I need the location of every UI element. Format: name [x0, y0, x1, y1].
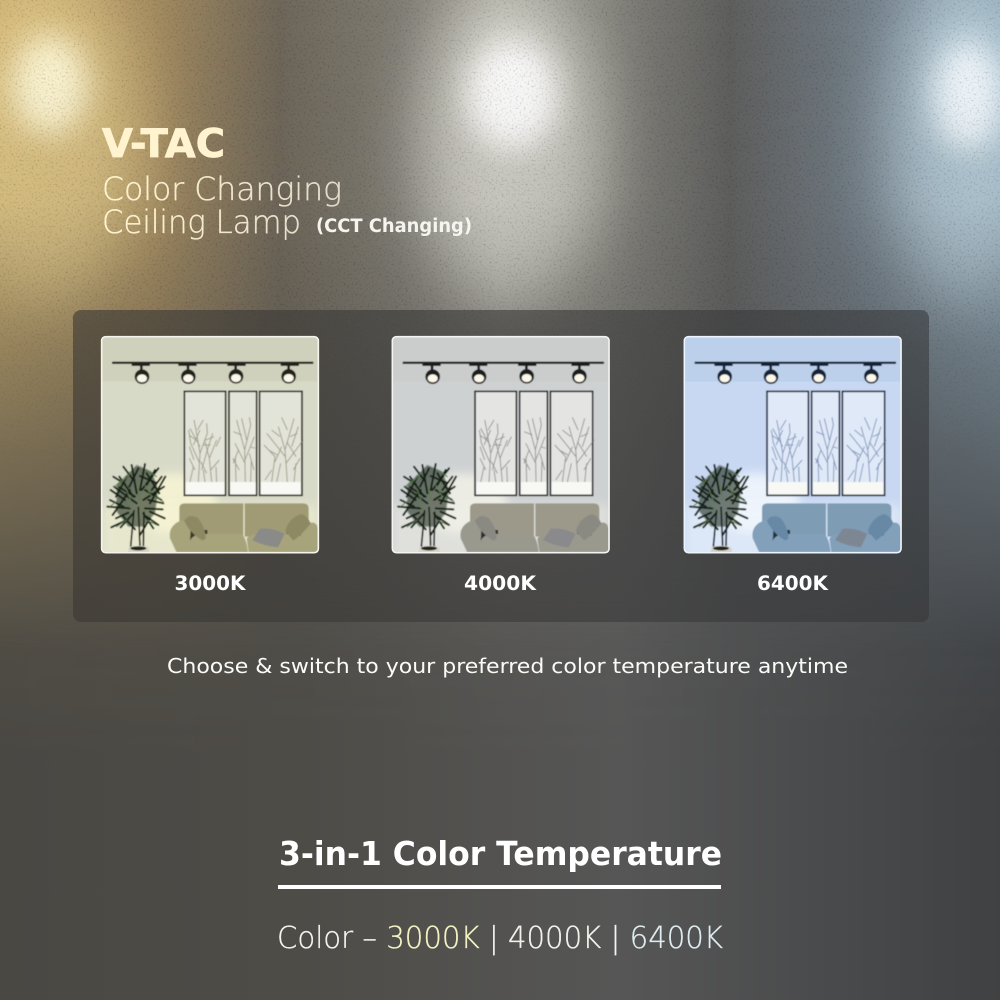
photo: 3000K room	[102, 337, 318, 560]
photo: 6400K room	[684, 337, 901, 560]
label: 4000K: 4000K	[464, 572, 537, 595]
label: 3000K: 3000K	[174, 572, 246, 595]
header block	[102, 122, 472, 241]
heading underline	[278, 885, 721, 889]
photo: 4000K room	[392, 337, 609, 560]
label: 6400K: 6400K	[757, 572, 829, 595]
color temperature list: Color – 3000K | 4000K | 6400K	[277, 921, 723, 956]
panel: color temperature comparison	[73, 310, 929, 622]
CCT note: (CCT Changing)	[316, 216, 472, 237]
title line two: Ceiling Lamp	[102, 203, 301, 241]
section heading: 3-in-1 Color Temperature	[279, 834, 722, 873]
caption: Choose & switch to your preferred color temperature anytime	[167, 654, 848, 678]
brand name: V-TAC	[102, 122, 225, 167]
title line one: Color Changing	[102, 170, 342, 208]
